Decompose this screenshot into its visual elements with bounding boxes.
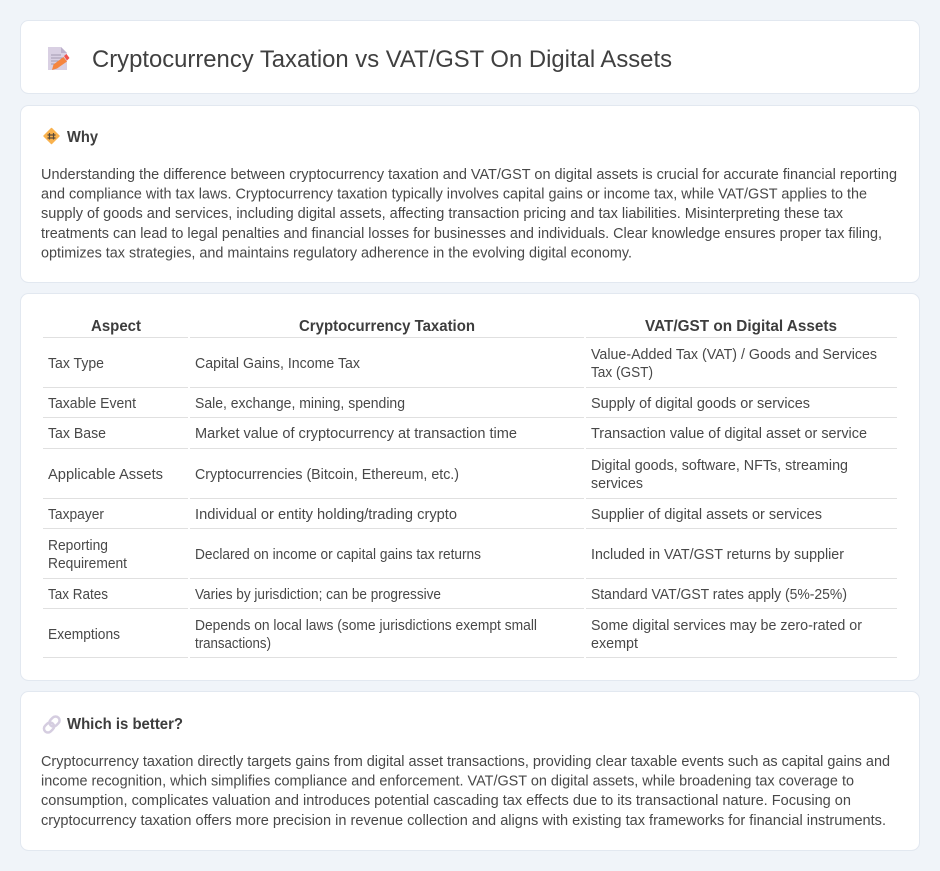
row: reporting requirement <box>48 538 844 572</box>
text block: why paragraph: Understanding the difference between cryptocurrency taxation and VAT/GST on digital assets is crucial for accurate financial reporting <box>41 167 897 183</box>
row: exemptions <box>48 618 862 652</box>
panel: which is better <box>20 692 920 850</box>
row: tax rates: Tax Rates <box>48 587 108 603</box>
text block: why paragraph <box>41 167 897 261</box>
row: tax rates: Varies by jurisdiction; can be progressive <box>195 587 441 603</box>
row: tax base: Tax Base <box>48 426 106 442</box>
row: reporting requirement: Included in VAT/GST returns by supplier <box>591 547 844 563</box>
text block: why paragraph: and compliance with tax laws. Cryptocurrency taxation typically involves capital gains or income tax, while VAT/GST applies to the <box>41 187 867 203</box>
title: Cryptocurrency Taxation vs VAT/GST On Digital Assets <box>92 46 672 73</box>
row: tax base <box>48 426 867 442</box>
row: tax type: Value-Added Tax (VAT) / Goods and Services <box>591 347 877 363</box>
row: applicable assets: Applicable Assets <box>48 467 163 483</box>
row: tax type: Tax Type <box>48 356 104 372</box>
row: taxpayer: Taxpayer <box>48 507 104 523</box>
text block: which is better paragraph: consumption, complicates valuation and introduces potential cascading tax effects due to its transactional nature. Focusing on <box>41 793 851 809</box>
row: tax base: Market value of cryptocurrency at transaction time <box>195 426 517 442</box>
row: tax rates: Standard VAT/GST rates apply (5%-25%) <box>591 587 847 603</box>
text block: which is better paragraph <box>41 754 890 829</box>
row: taxable event: Supply of digital goods or services <box>591 396 810 412</box>
text block: which is better paragraph: Cryptocurrency taxation directly targets gains from digital asset transactions, providing clear taxable events such as capital gains and <box>41 754 890 770</box>
table header: VAT/GST on Digital Assets <box>645 318 837 335</box>
row: exemptions: Depends on local laws (some jurisdictions exempt small <box>195 618 537 634</box>
table header: Cryptocurrency Taxation <box>299 318 475 335</box>
row: exemptions: Some digital services may be zero-rated or <box>591 618 862 634</box>
row: tax rates <box>48 587 847 603</box>
row: tax type <box>48 347 877 381</box>
icon: warning diamond <box>44 128 59 144</box>
row: applicable assets <box>48 458 848 492</box>
row: tax type: Capital Gains, Income Tax <box>195 356 361 372</box>
row: applicable assets: services <box>591 476 643 492</box>
row: exemptions: exempt <box>591 636 638 652</box>
table header <box>91 318 837 335</box>
row: exemptions: transactions) <box>195 636 271 652</box>
row: applicable assets: Cryptocurrencies (Bitcoin, Ethereum, etc.) <box>195 467 459 483</box>
row: taxpayer: Supplier of digital assets or services <box>591 507 822 523</box>
text block: why paragraph: treatments can lead to legal penalties and financial losses for businesses and individuals. Clear knowledge ensures proper tax filing, <box>41 226 882 242</box>
table header: Aspect <box>91 318 141 335</box>
text block: which is better paragraph: cryptocurrency taxation offers more precision in revenue collection and aligns with existing tax frameworks for financial instruments. <box>41 813 886 829</box>
icon: link <box>42 715 61 734</box>
icon: document with pencil <box>48 47 70 70</box>
panel: why <box>20 106 920 282</box>
panel: comparison table <box>20 294 920 680</box>
row: reporting requirement: Reporting <box>48 538 108 554</box>
row: taxable event: Taxable Event <box>48 396 136 412</box>
row: taxable event: Sale, exchange, mining, spending <box>195 396 405 412</box>
heading: why: Why <box>67 129 98 146</box>
row: tax type: Tax (GST) <box>591 365 653 381</box>
row: exemptions: Exemptions <box>48 627 120 643</box>
row: applicable assets: Digital goods, software, NFTs, streaming <box>591 458 848 474</box>
row: taxpayer: Individual or entity holding/trading crypto <box>195 507 457 523</box>
row: taxable event <box>48 396 810 412</box>
row: tax base: Transaction value of digital asset or service <box>591 426 867 442</box>
panel: title card <box>20 20 920 94</box>
text block: which is better paragraph: income recognition, which simplifies compliance and enforcement. VAT/GST on digital assets, while broadening tax coverage to <box>41 774 854 790</box>
text block: why paragraph: optimizes tax strategies, and maintains regulatory adherence in the evolving digital economy. <box>41 245 632 261</box>
row: reporting requirement: Declared on income or capital gains tax returns <box>195 547 481 563</box>
row: taxpayer <box>48 507 822 523</box>
heading: which is better: Which is better? <box>67 716 183 733</box>
text block: why paragraph: supply of goods and services, including digital assets, affecting transaction pricing and tax liabilities. Misinterpreting these tax <box>41 206 844 222</box>
row: reporting requirement: Requirement <box>48 556 127 572</box>
